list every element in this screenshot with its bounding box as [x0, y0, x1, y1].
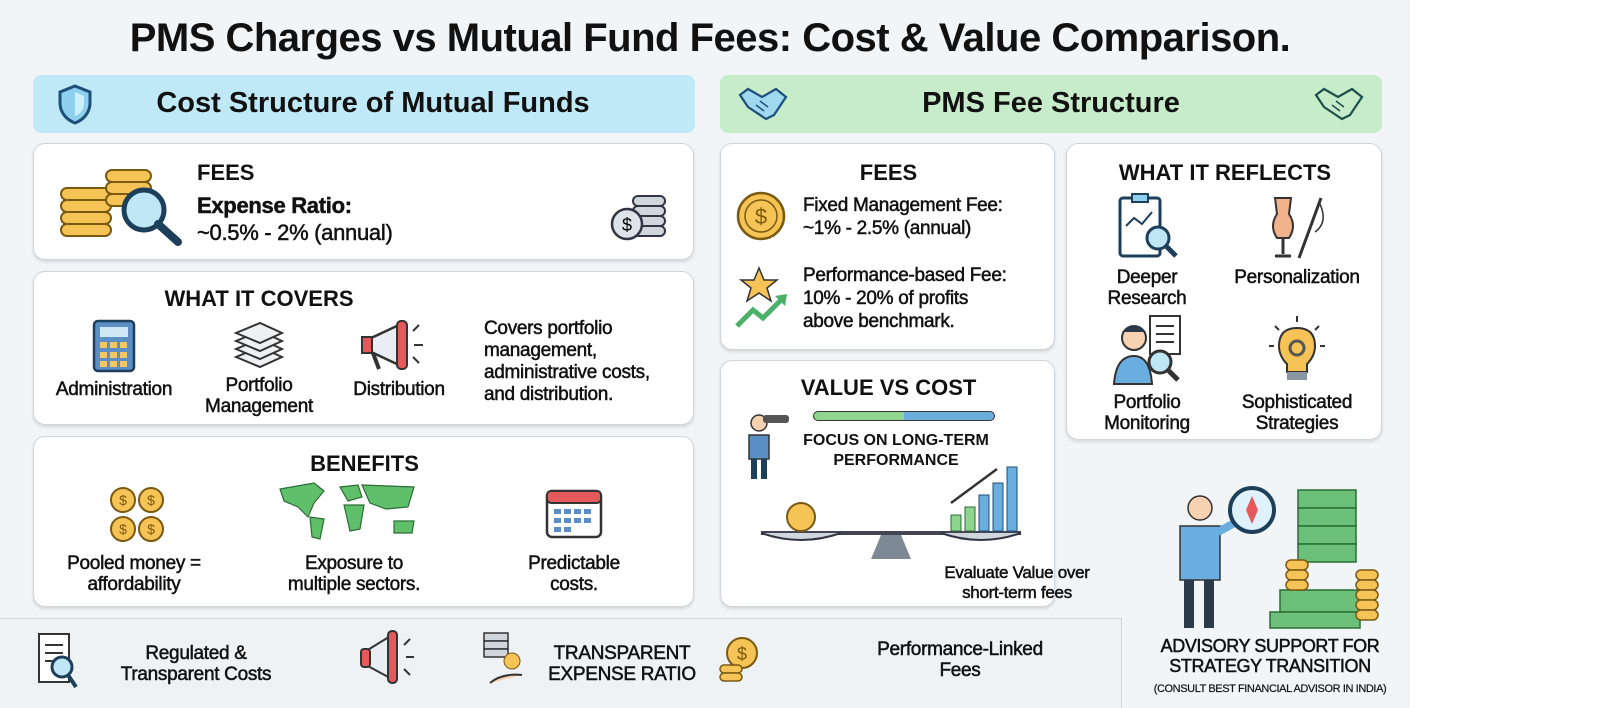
heading: FEES	[197, 160, 254, 185]
heading: FEES	[860, 160, 917, 185]
heading text: PMS Fee Structure	[922, 87, 1180, 119]
item: pooled money	[67, 487, 201, 595]
item: transparent expense ratio: EXPENSE RATIO	[548, 664, 696, 685]
item: distribution: Distribution	[353, 379, 445, 400]
text: advisory support: ADVISORY SUPPORT FOR	[1161, 636, 1379, 656]
item: deeper research: Deeper	[1117, 267, 1177, 288]
item: portfolio monitoring: Portfolio	[1113, 392, 1180, 413]
icon: shield	[58, 84, 92, 125]
text	[944, 563, 1090, 602]
text: performance-linked fees: Performance-Linked	[877, 639, 1043, 660]
item: administration: Administration	[56, 379, 172, 400]
text: advisory support: STRATEGY TRANSITION	[1169, 656, 1371, 676]
item: deeper research: Research	[1108, 288, 1186, 309]
heading: BENEFITS	[310, 451, 419, 476]
text: ~0.5% - 2% (annual)	[197, 220, 392, 245]
item: portfolio monitoring	[1104, 315, 1190, 434]
item: portfolio monitoring: Monitoring	[1104, 413, 1190, 434]
item: world map: Exposure to	[305, 553, 403, 574]
item: pooled money: affordability	[88, 574, 180, 595]
panel: what it reflects	[1066, 143, 1382, 440]
icon: dollar coin	[736, 192, 786, 240]
item: regulated costs: Regulated &	[145, 643, 247, 664]
text: performance fee: 10% - 20% of profits	[803, 288, 968, 309]
item: calendar: costs.	[550, 574, 598, 595]
text: performance fee	[803, 265, 1007, 332]
panel: PMS fees	[720, 143, 1055, 350]
text: performance fee: above benchmark.	[803, 311, 955, 332]
text: fixed fee: Fixed Management Fee:	[803, 195, 1003, 216]
title: PMS Charges vs Mutual Fund Fees: Cost & Value Comparison.	[130, 16, 1290, 60]
icon: coins with magnifier	[60, 169, 182, 246]
panel: value vs cost	[720, 360, 1055, 607]
text: Expense Ratio:	[197, 193, 352, 218]
item: distribution	[353, 320, 445, 400]
icon: star with arrow	[735, 266, 787, 328]
item: deeper research	[1108, 193, 1186, 309]
item: portfolio management	[205, 322, 314, 417]
item: pooled money: $	[147, 492, 155, 508]
item: personalization	[1234, 197, 1360, 288]
item: sophisticated strategies: Strategies	[1256, 413, 1338, 434]
item: transparent expense ratio	[483, 632, 758, 685]
icon: handshake left	[738, 88, 788, 120]
item: portfolio management: Portfolio	[225, 375, 292, 396]
header: PMS	[720, 75, 1382, 133]
icon: balance scale with chart	[760, 466, 1022, 559]
text: PERFORMANCE	[833, 452, 959, 469]
text: performance-linked fees	[877, 639, 1043, 681]
text: administrative costs,	[484, 362, 650, 383]
item: administration	[56, 320, 172, 400]
heading: WHAT IT COVERS	[164, 286, 354, 311]
progress bar	[813, 411, 995, 421]
item: calendar: Predictable	[528, 553, 620, 574]
heading text: Cost Structure of Mutual Funds	[156, 87, 590, 119]
icon: coin stack: $	[622, 215, 632, 235]
heading: WHAT IT REFLECTS	[1119, 160, 1331, 185]
text: fixed fee: ~1% - 2.5% (annual)	[803, 218, 971, 239]
text	[803, 432, 989, 469]
text: performance-linked fees: Fees	[939, 660, 981, 681]
item: world map: multiple sectors.	[288, 574, 420, 595]
panel: MF fees	[33, 143, 694, 260]
item: pooled money: Pooled money =	[67, 553, 201, 574]
text: FOCUS ON LONG-TERM	[803, 432, 989, 449]
text: Evaluate Value over	[944, 563, 1090, 582]
text: advisory support	[1154, 636, 1386, 695]
item: transparent expense ratio: TRANSPARENT	[554, 643, 690, 664]
item: regulated costs	[38, 633, 272, 688]
text: management,	[484, 340, 597, 361]
item: calendar	[528, 490, 620, 595]
panel: what it covers	[33, 271, 694, 425]
item: pooled money: $	[147, 521, 155, 537]
panel: benefits	[33, 436, 694, 607]
text: Covers portfolio	[484, 318, 612, 339]
item: pooled money: $	[119, 521, 127, 537]
icon: dollar coin: $	[755, 204, 767, 229]
text: performance fee: Performance-based Fee:	[803, 265, 1007, 286]
item: regulated costs: Transparent Costs	[121, 664, 271, 685]
heading: VALUE VS COST	[801, 375, 976, 400]
item: world map	[279, 482, 420, 595]
icon: coin stack	[610, 195, 666, 240]
text: advisory support: (CONSULT BEST FINANCIAL ADVISOR IN INDIA)	[1154, 683, 1386, 695]
illustration: advisor with compass and money	[1179, 486, 1379, 629]
icon: megaphone	[360, 630, 414, 684]
text: and distribution.	[484, 384, 613, 405]
header: mutual funds	[33, 75, 695, 133]
bottom strip	[0, 618, 1122, 708]
item: pooled money: $	[119, 492, 127, 508]
icon: handshake right	[1314, 88, 1364, 120]
icon: person with telescope	[748, 414, 789, 479]
item: transparent expense ratio: $	[737, 644, 747, 664]
item: sophisticated strategies	[1242, 316, 1352, 434]
text: short-term fees	[962, 583, 1072, 602]
item: sophisticated strategies: Sophisticated	[1242, 392, 1352, 413]
text: fixed fee	[803, 195, 1003, 239]
item: portfolio management: Management	[205, 396, 313, 417]
text	[484, 318, 650, 405]
text	[197, 193, 392, 245]
item: personalization: Personalization	[1234, 267, 1360, 288]
